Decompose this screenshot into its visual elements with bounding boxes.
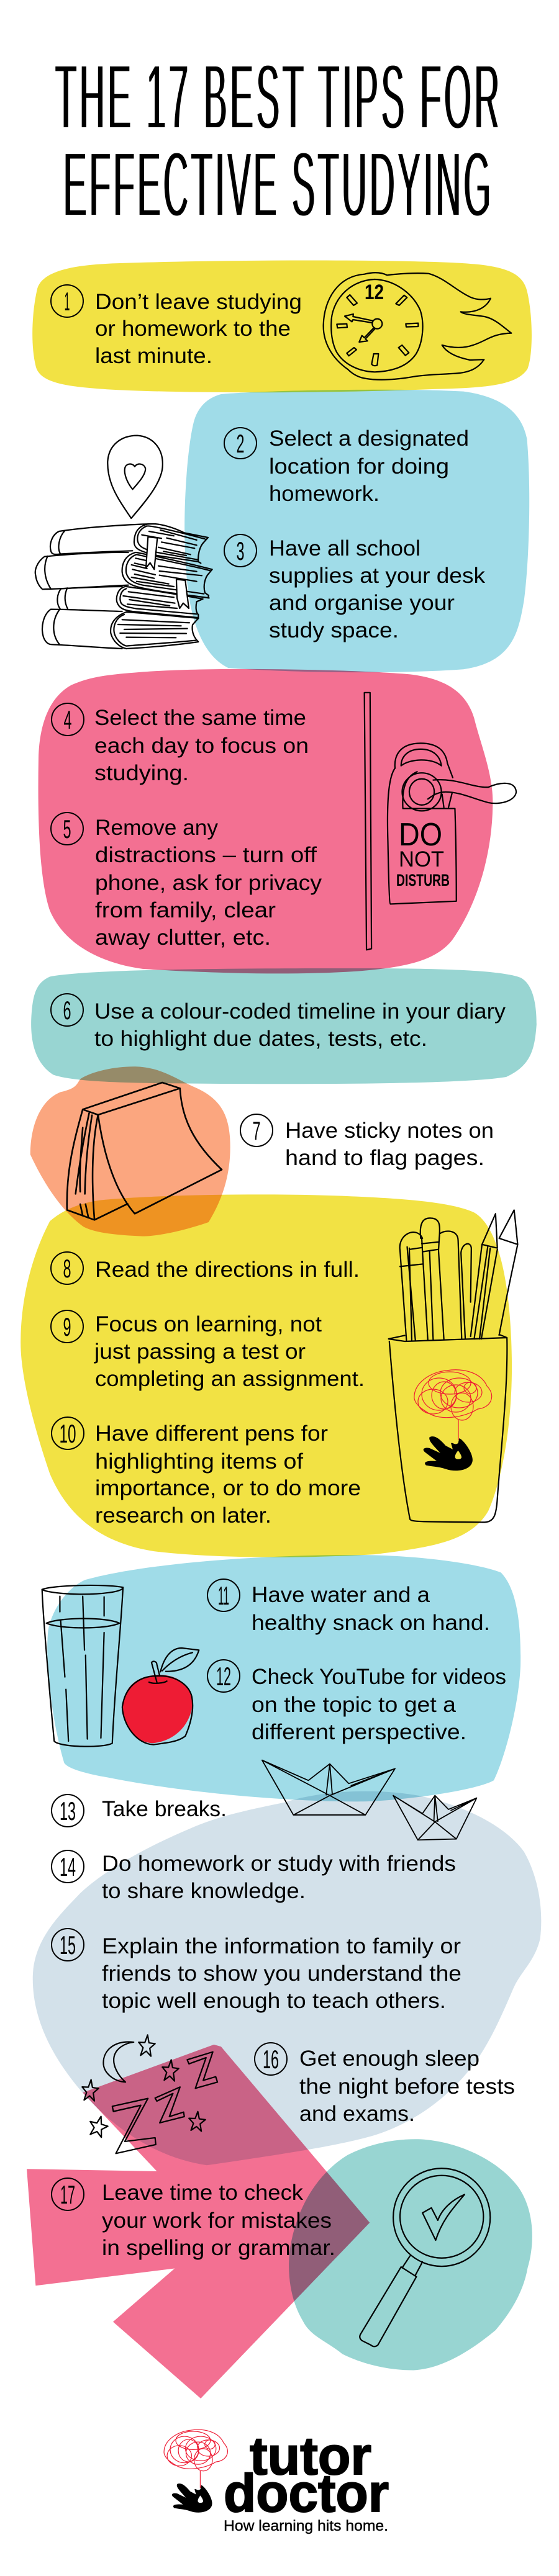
tip 3 text: 3: [236, 536, 245, 565]
tip 5 text: Remove any: [95, 816, 219, 840]
icon: door with do not disturb sign: DISTURB: [396, 871, 450, 889]
tip 17 text: your work for mistakes: [102, 2209, 332, 2233]
tip 3 text: [224, 534, 486, 642]
tip 9 text: just passing a test or: [94, 1340, 306, 1364]
panel: tip 7 orange: [30, 1066, 494, 1236]
tip 9 text: completing an assignment.: [95, 1367, 365, 1391]
tip 8 text: [51, 1252, 360, 1284]
panel: tips 14 to 16 grey blue: [33, 1791, 541, 2165]
tip 10 text: highlighting items of: [95, 1449, 303, 1474]
tip 5 text: from family, clear: [95, 898, 276, 922]
tip 3 text: study space.: [269, 618, 399, 642]
tip 5 text: [51, 813, 322, 950]
tip 2 text: location for doing: [269, 454, 449, 479]
panel: tips 2 and 3 blue: [184, 390, 529, 672]
icon: moon, stars and zzz: [81, 2034, 217, 2153]
icon: sticky notes: [67, 1083, 222, 1220]
tip 6 text: Use a colour-coded timeline in your diary: [94, 999, 506, 1024]
tip 4 text: studying.: [94, 761, 189, 785]
icon: logo hand: [172, 2484, 212, 2513]
tip 7 text: 7: [252, 1116, 261, 1145]
tip 1 text: last minute.: [95, 344, 212, 368]
tip 6 text: [51, 994, 506, 1051]
panel: tips 8 to 10 yellow: [20, 1194, 512, 1557]
tip 2 text: 2: [236, 429, 245, 458]
tip 11 text: 11: [218, 1581, 229, 1610]
icon: stack of books: [35, 524, 212, 649]
tip 1 text: 1: [65, 287, 70, 316]
panel: tip 1 yellow: [32, 261, 532, 392]
tip 10 text: importance, or to do more: [95, 1476, 361, 1500]
tip 12 text: on the topic to get a: [252, 1693, 457, 1717]
icon: flaming clock: [324, 272, 511, 380]
tip 15 text: Explain the information to family or: [102, 1934, 461, 1958]
icon: door with do not disturb sign: [365, 693, 516, 950]
panel: tips 11 and 12 blue: [47, 1555, 520, 1801]
panel: tip 17 pink arrow: [27, 2045, 370, 2398]
tip 5 text: away clutter, etc.: [95, 925, 271, 950]
icon: location pin with heart: [107, 436, 163, 518]
tip 2 text: homework.: [269, 482, 379, 506]
tip 10 text: [52, 1417, 361, 1528]
tip 11 text: [207, 1579, 490, 1635]
tip 16 text: [255, 2043, 515, 2126]
tip 12 text: Check YouTube for videos: [252, 1665, 506, 1689]
tip 9 text: Focus on learning, not: [95, 1312, 322, 1336]
tip 13 text: 13: [60, 1796, 76, 1826]
tip 17 text: [52, 2178, 335, 2260]
tip 16 text: and exams.: [299, 2102, 415, 2126]
tip 10 text: research on later.: [95, 1503, 271, 1528]
tip 4 text: each day to focus on: [94, 734, 309, 758]
tip 7 text: [240, 1114, 494, 1170]
tip 5 text: distractions – turn off: [95, 843, 317, 867]
tip 12 text: different perspective.: [252, 1720, 466, 1744]
tip 13 text: [52, 1795, 227, 1827]
tip 10 text: 10: [60, 1419, 76, 1448]
tip 15 text: friends to show you understand the: [102, 1961, 461, 1986]
panel: teal circle: [289, 2139, 532, 2371]
tip 4 text: Select the same time: [94, 706, 306, 730]
title: EFFECTIVE STUDYING: [63, 133, 491, 236]
icon: door with do not disturb sign: NOT: [399, 847, 444, 871]
tip 1 text: [51, 285, 302, 368]
tip 7 text: hand to flag pages.: [285, 1146, 484, 1170]
tip 8 text: 8: [63, 1254, 71, 1283]
icon: brain scribble on cup: [414, 1370, 492, 1440]
tip 15 text: [52, 1929, 461, 2013]
icon: paper boats: [262, 1760, 476, 1840]
logo wordmark: How learning hits home.: [224, 2518, 388, 2534]
icon: door with do not disturb sign: DO: [399, 817, 442, 853]
icon: logo brain scribble: [164, 2430, 227, 2488]
tip 5 text: 5: [63, 814, 71, 844]
tip 1 text: Don’t leave studying: [95, 290, 302, 314]
tip 4 text: 4: [63, 705, 72, 734]
tip 15 text: topic well enough to teach others.: [102, 1989, 446, 2013]
tip 3 text: and organise your: [269, 591, 455, 615]
tip 9 text: 9: [63, 1312, 71, 1341]
tip 12 text: [207, 1660, 506, 1744]
tip 3 text: supplies at your desk: [269, 564, 486, 588]
tip 3 text: Have all school: [269, 536, 420, 561]
tip 6 text: to highlight due dates, tests, etc.: [94, 1027, 427, 1051]
tip 1 text: or homework to the: [95, 317, 291, 341]
logo: tutor doctor: [164, 2426, 389, 2534]
tip 14 text: 14: [60, 1852, 76, 1881]
icon: flaming clock: 12: [365, 281, 384, 304]
tip 2 text: [224, 426, 469, 506]
tip 11 text: Have water and a: [252, 1583, 430, 1607]
tip 10 text: Have different pens for: [95, 1421, 328, 1446]
tip 16 text: the night before tests: [299, 2074, 515, 2099]
panel: tip 6 teal: [31, 968, 537, 1084]
tip 14 text: Do homework or study with friends: [102, 1852, 456, 1876]
tip 11 text: healthy snack on hand.: [252, 1611, 490, 1635]
logo wordmark: [224, 2426, 389, 2534]
icon: magnifying glass with tick: [360, 2168, 490, 2346]
tip 17 text: 17: [60, 2180, 75, 2209]
tip 17 text: Leave time to check: [102, 2181, 304, 2205]
tip 13 text: Take breaks.: [102, 1797, 227, 1821]
tip 5 text: phone, ask for privacy: [95, 871, 322, 895]
tip 17 text: in spelling or grammar.: [102, 2236, 335, 2260]
tip 2 text: Select a designated: [269, 426, 469, 451]
tip 8 text: Read the directions in full.: [95, 1258, 360, 1282]
tip 16 text: Get enough sleep: [299, 2047, 479, 2071]
tip 14 text: to share knowledge.: [102, 1879, 306, 1903]
title: THE 17 BEST TIPS FOR: [55, 45, 499, 148]
tip 16 text: 16: [263, 2045, 279, 2074]
tip 9 text: [51, 1310, 365, 1391]
panel: tips 4 and 5 pink: [39, 669, 493, 973]
icon: glass of water: [42, 1585, 123, 1747]
icon: red apple: [122, 1648, 199, 1745]
icon: pencil cup: [389, 1210, 517, 1522]
tip 4 text: [52, 703, 309, 785]
icon: black hand on cup: [424, 1436, 473, 1470]
title: [55, 45, 499, 236]
tip 15 text: 15: [60, 1930, 76, 1960]
tip 7 text: Have sticky notes on: [285, 1119, 494, 1143]
logo wordmark: doctor: [224, 2464, 389, 2523]
tip 12 text: 12: [216, 1662, 231, 1691]
tip 14 text: [52, 1850, 456, 1903]
logo wordmark: tutor: [250, 2426, 371, 2486]
tip 6 text: 6: [63, 996, 71, 1025]
